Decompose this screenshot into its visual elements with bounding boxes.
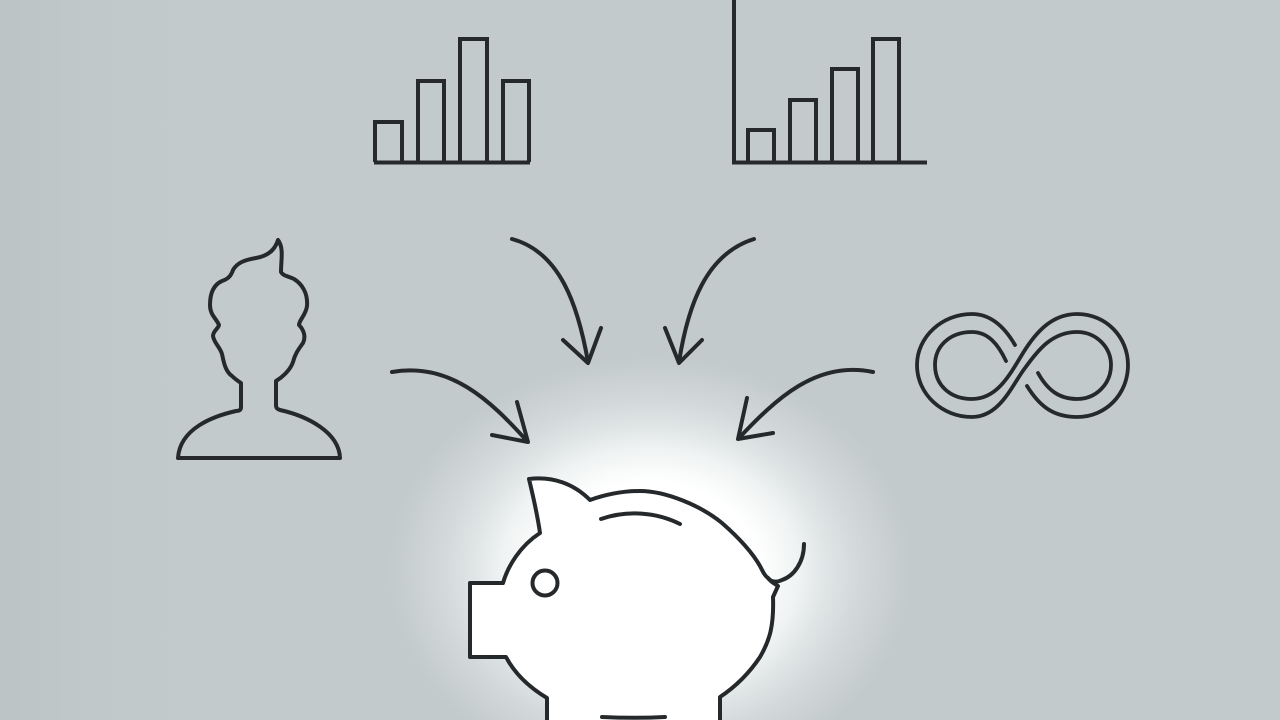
bar chart: left: [374, 39, 530, 162]
belly line: [602, 715, 665, 720]
bar chart: right with axis: [734, 0, 927, 162]
pig eye: [532, 570, 558, 596]
arrow: lower right: [738, 370, 873, 439]
arrow: lower left: [392, 370, 528, 442]
pig body: [470, 478, 778, 720]
icon: person silhouette: [178, 240, 340, 458]
icon: piggy bank: [470, 478, 804, 720]
arrow: top right: [665, 239, 754, 363]
icon: infinity loop: [917, 314, 1128, 417]
arrow: top left: [512, 239, 601, 363]
coin slot: [601, 513, 680, 524]
pig outline: [470, 478, 778, 720]
pig tail: [768, 544, 804, 582]
